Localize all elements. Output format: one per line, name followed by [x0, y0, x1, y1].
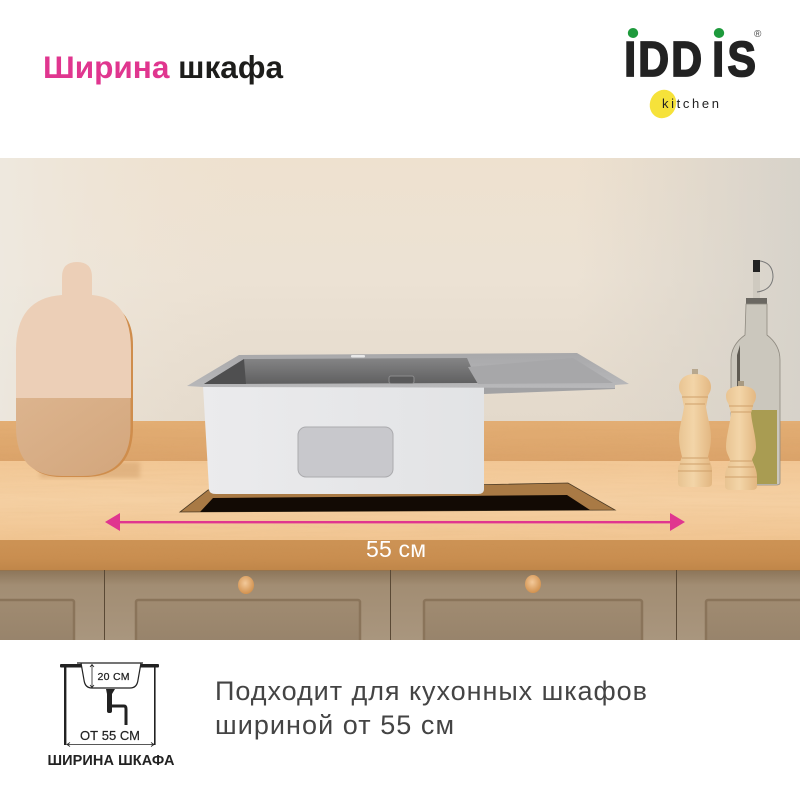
overflow cover panel: [298, 427, 393, 477]
countertop front edge: [0, 540, 800, 570]
sink: [187, 353, 629, 494]
board shadow on counter: [40, 462, 140, 478]
sink dimensions diagram: [48, 663, 175, 769]
depth arrow: [90, 664, 94, 688]
width label: ОТ 55 СМ: [80, 728, 140, 743]
drain siphon: [106, 689, 115, 713]
drainboard: [468, 358, 613, 384]
pepper mill short: [725, 381, 757, 490]
countertop: [0, 461, 800, 540]
sink bowl left wall: [204, 359, 246, 384]
title: Ширина шкафа: [43, 49, 283, 85]
cabinet knob left: [238, 576, 254, 594]
countertop line: [60, 664, 159, 668]
pepper mill tall: [678, 369, 712, 487]
oil bottle: [731, 260, 780, 485]
description line 1: Подходит для кухонных шкафов: [215, 676, 647, 706]
faucet hole: [351, 355, 365, 358]
wood grain: [0, 421, 800, 570]
logo green dot right: [714, 28, 724, 38]
drain pipe: [112, 706, 126, 725]
width arrow: [67, 742, 154, 746]
cabinets: [0, 570, 800, 640]
width label: 55 см: [366, 536, 426, 562]
sink top plate: [187, 353, 629, 388]
sink body: [203, 386, 484, 494]
wooden backsplash: [0, 421, 800, 461]
logo: IDDIS kitchen: [624, 28, 762, 123]
cabinet right wall: [154, 667, 156, 745]
sink front overhang: [484, 386, 615, 394]
cabinet knob right: [525, 575, 541, 593]
logo kitchen text: kitchen: [662, 96, 719, 111]
cutout in countertop: [180, 483, 615, 512]
description text: [215, 676, 647, 740]
logo green dot left: [628, 28, 638, 38]
logo registered mark: ®: [754, 29, 762, 40]
kitchen scene photo: [0, 158, 800, 650]
width arrow: [105, 513, 685, 531]
drain strainer: [389, 376, 414, 384]
logo wordmark: IDDIS: [624, 31, 756, 87]
sink bowl: [204, 358, 478, 384]
logo yellow blob: [645, 85, 681, 123]
caption: ШИРИНА ШКАФА: [48, 753, 175, 769]
wall: [0, 158, 800, 421]
description line 2: шириной от 55 см: [215, 710, 454, 740]
depth label: 20 СМ: [98, 671, 130, 683]
cutting board: [16, 262, 133, 477]
sink profile: [77, 663, 143, 688]
cabinet left wall: [64, 667, 66, 745]
